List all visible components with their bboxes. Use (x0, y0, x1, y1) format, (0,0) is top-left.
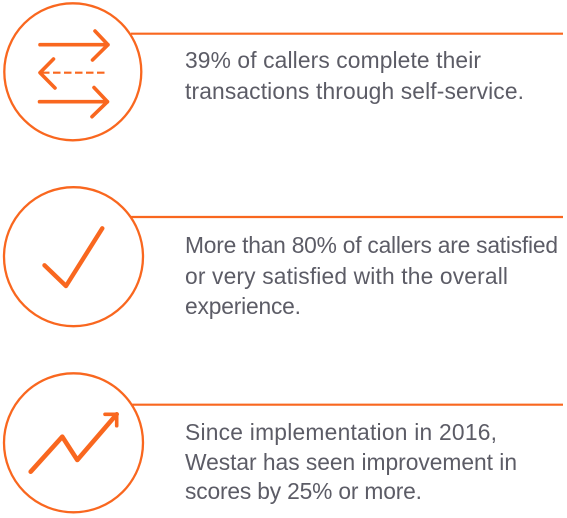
text: self-service: 39% of callers complete their (185, 47, 481, 73)
panel: improvement statistic (4, 373, 563, 512)
text: self-service: transactions through self-service. (185, 78, 524, 104)
icon: transfer arrows (4, 3, 141, 140)
text: improvement: scores by 25% or more. (185, 478, 422, 504)
text: satisfaction: or very satisfied with the overall (185, 263, 508, 289)
icon: check mark (4, 187, 143, 326)
panel: self-service statistic (4, 3, 563, 140)
text: satisfaction: experience. (185, 293, 301, 319)
text: improvement: Westar has seen improvement in (185, 449, 517, 475)
text: satisfaction: More than 80% of callers are satisfied (185, 232, 558, 258)
connector line 2 (131, 216, 563, 218)
connector line 1 (131, 33, 563, 35)
icon: rising trend arrow (4, 373, 143, 512)
text: improvement: Since implementation in 2016, (185, 419, 497, 445)
panel: satisfaction statistic (4, 187, 563, 326)
text: satisfaction (185, 232, 558, 319)
text: improvement (185, 419, 517, 504)
connector line 3 (131, 404, 563, 406)
text: self-service (185, 47, 524, 104)
